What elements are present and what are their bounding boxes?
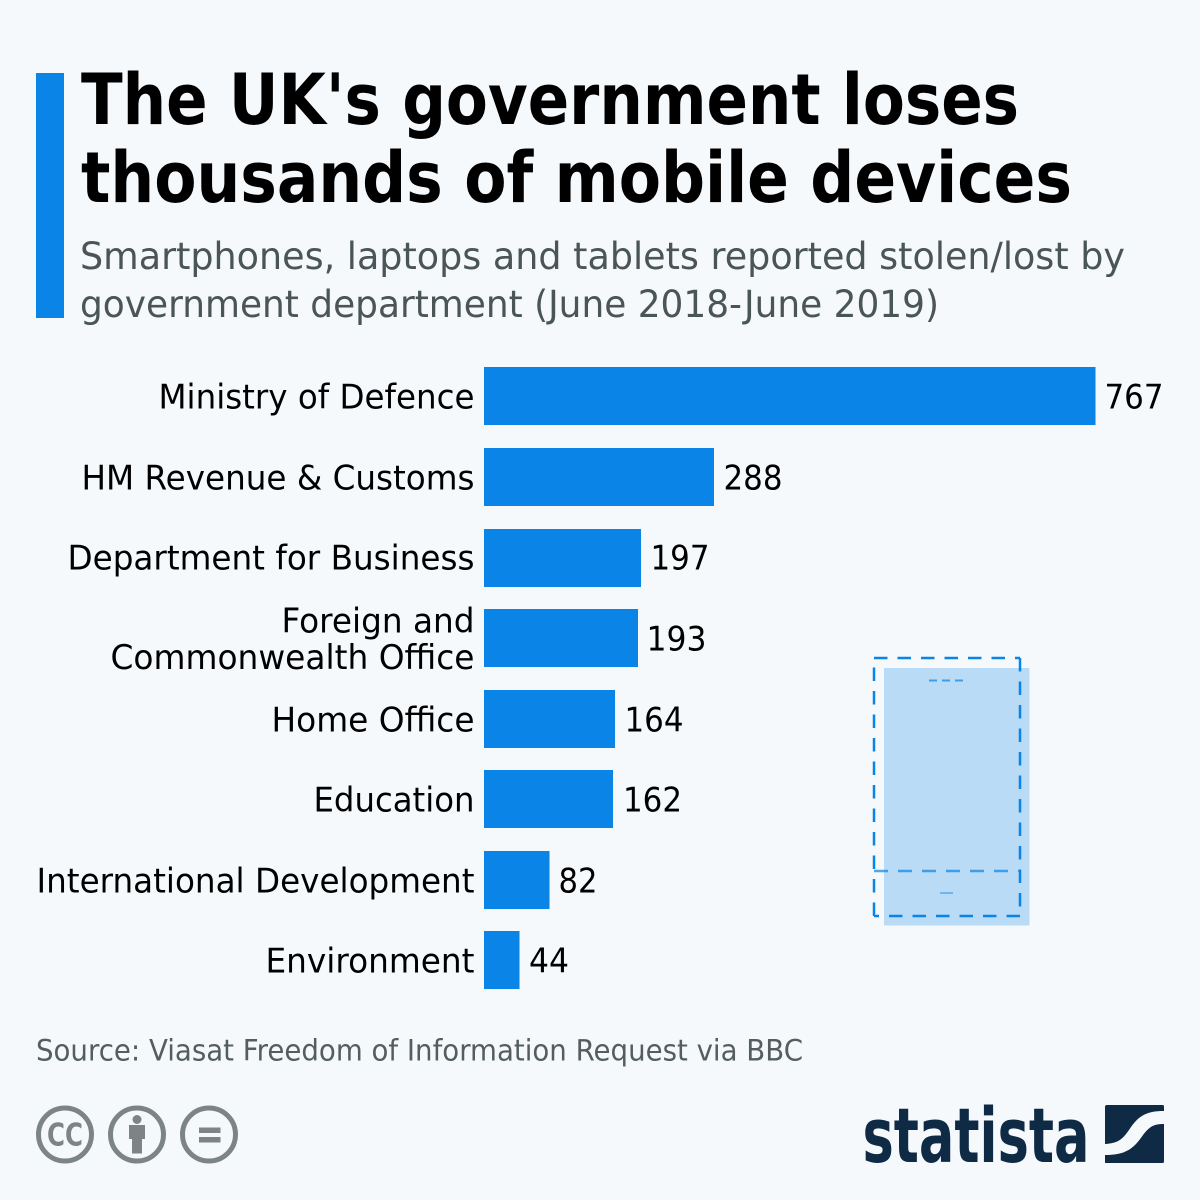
row: International Development: International Development bbox=[36, 862, 474, 902]
row: Environment: Environment bbox=[266, 942, 474, 982]
row: HM Revenue & Customs: 288 bbox=[724, 458, 782, 498]
row: Department for Business: Department for Business bbox=[68, 538, 474, 578]
row: Education bbox=[314, 770, 682, 828]
logo: statista: statista bbox=[862, 1091, 1090, 1180]
row: Environment bbox=[266, 931, 569, 989]
title: The UK's government loses bbox=[81, 59, 1019, 141]
row: Ministry of Defence: Ministry of Defence bbox=[158, 378, 474, 418]
row: Department for Business bbox=[68, 529, 710, 587]
icon: no derivatives bbox=[182, 1108, 236, 1161]
logo mark bbox=[1105, 1105, 1164, 1163]
row: Department for Business: 197 bbox=[650, 538, 710, 578]
icon: attribution bbox=[110, 1108, 164, 1161]
row: Home Office bbox=[272, 690, 684, 748]
row: Home Office: Home Office bbox=[272, 700, 474, 740]
row: International Development bbox=[36, 851, 598, 909]
illustration: phone bbox=[874, 658, 1030, 926]
row: Foreign and Commonwealth Office: Foreign and bbox=[282, 602, 474, 642]
row: Foreign and Commonwealth Office: 193 bbox=[646, 620, 706, 660]
row: Foreign and Commonwealth Office bbox=[110, 602, 706, 678]
row: Education: 162 bbox=[623, 780, 682, 820]
row: HM Revenue & Customs: HM Revenue & Customs bbox=[82, 458, 474, 498]
row: Education: Education bbox=[314, 780, 474, 820]
subtitle bbox=[80, 235, 1125, 326]
row: HM Revenue & Customs bbox=[82, 448, 782, 506]
row: Ministry of Defence: 767 bbox=[1104, 378, 1164, 418]
title: thousands of mobile devices bbox=[81, 137, 1072, 219]
title bbox=[81, 59, 1072, 219]
bar chart bbox=[36, 367, 1164, 989]
row: Home Office: 164 bbox=[624, 700, 684, 740]
icon: creative commons: CC bbox=[47, 1118, 83, 1154]
row: Environment: 44 bbox=[529, 942, 569, 982]
icon: creative commons bbox=[38, 1108, 92, 1161]
subtitle: government department (June 2018-June 2019) bbox=[80, 283, 939, 326]
row: International Development: 82 bbox=[558, 862, 598, 902]
source: Source: Viasat Freedom of Information Request via BBC bbox=[36, 1034, 803, 1068]
accent bar bbox=[36, 73, 64, 318]
row: Ministry of Defence bbox=[158, 367, 1164, 425]
subtitle: Smartphones, laptops and tablets reported stolen/lost by bbox=[80, 235, 1125, 278]
row: Foreign and Commonwealth Office: Commonwealth Office bbox=[110, 638, 474, 678]
